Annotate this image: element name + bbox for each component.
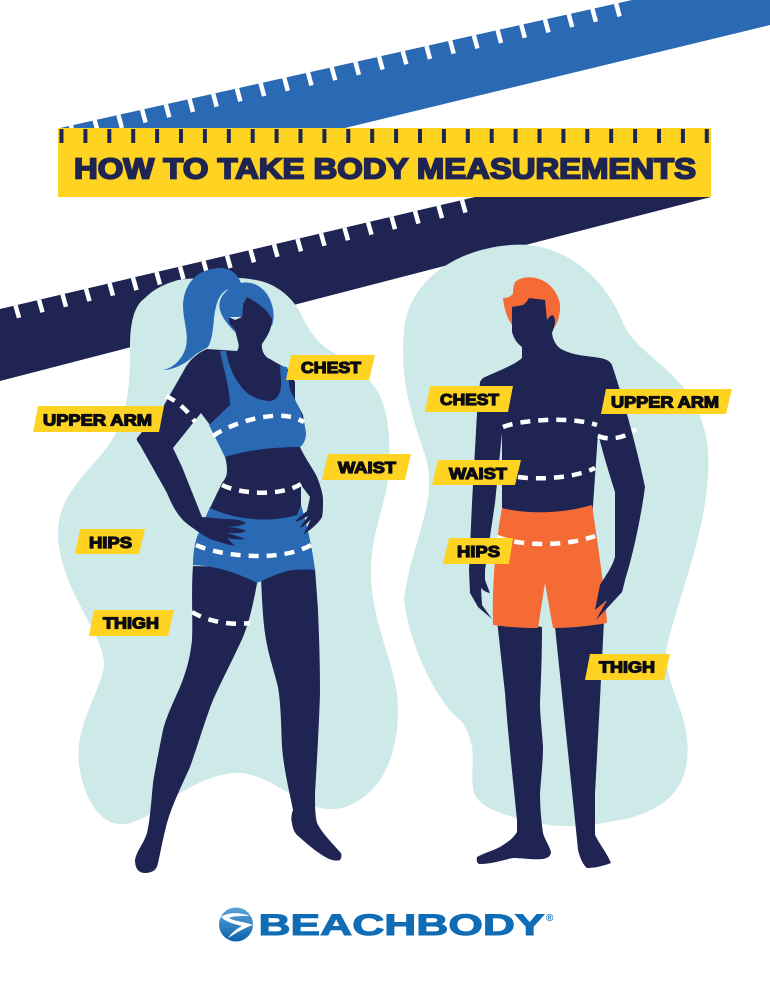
label: man chest xyxy=(425,386,513,412)
woman sports bra xyxy=(209,351,306,457)
label: man thigh: THIGH xyxy=(599,660,655,676)
label: woman waist: WAIST xyxy=(338,460,397,477)
man right hand over shorts xyxy=(595,557,625,620)
registered mark: ® xyxy=(546,913,554,924)
title: HOW TO TAKE BODY MEASUREMENTS xyxy=(74,154,696,186)
woman upper arm dashes xyxy=(166,396,195,422)
label: woman upper arm: UPPER ARM xyxy=(43,412,152,430)
figure: woman xyxy=(135,268,342,873)
background blob: woman xyxy=(58,277,398,824)
man shorts xyxy=(493,505,607,628)
woman hips dashes xyxy=(196,545,311,556)
label: man hips xyxy=(443,538,513,564)
figure: man xyxy=(469,277,645,868)
logo: Beachbody xyxy=(219,908,554,942)
man waist dashes xyxy=(518,468,595,478)
label: man upper arm: UPPER ARM xyxy=(611,394,719,412)
label: man chest: CHEST xyxy=(440,392,500,409)
title banner: yellow ruler xyxy=(58,128,711,197)
man hips dashes xyxy=(497,536,595,544)
label: woman waist xyxy=(322,454,411,480)
label: man waist xyxy=(432,460,521,485)
man chest dashes xyxy=(503,420,597,427)
blue measuring tape xyxy=(60,0,770,138)
wordmark: BEACHBODY xyxy=(258,909,545,942)
woman shorts xyxy=(193,505,315,583)
label: woman chest xyxy=(286,355,375,380)
man upper arm dashes xyxy=(598,429,636,438)
label: man hips: HIPS xyxy=(457,544,500,561)
label: woman upper arm xyxy=(33,406,164,432)
label: man upper arm xyxy=(601,389,732,414)
label: woman thigh xyxy=(89,610,174,636)
man torso, arms and head xyxy=(469,298,645,620)
woman chest dashes xyxy=(213,416,304,436)
background blob: man xyxy=(403,245,708,826)
woman waist dashes xyxy=(222,484,301,493)
label: man thigh xyxy=(585,654,670,680)
label: man waist: WAIST xyxy=(449,466,508,483)
label: woman thigh: THIGH xyxy=(103,616,159,632)
label: woman hips xyxy=(75,529,145,554)
navy measuring tape xyxy=(0,197,711,381)
label: woman chest: CHEST xyxy=(301,360,362,377)
man hair xyxy=(503,277,560,335)
label: woman hips: HIPS xyxy=(89,535,132,552)
woman body, arms and head xyxy=(137,297,323,546)
icon: logo globe xyxy=(219,908,253,942)
man legs xyxy=(477,620,611,868)
woman thigh dashes xyxy=(192,612,250,624)
woman hair xyxy=(163,268,274,370)
woman legs xyxy=(135,566,342,873)
